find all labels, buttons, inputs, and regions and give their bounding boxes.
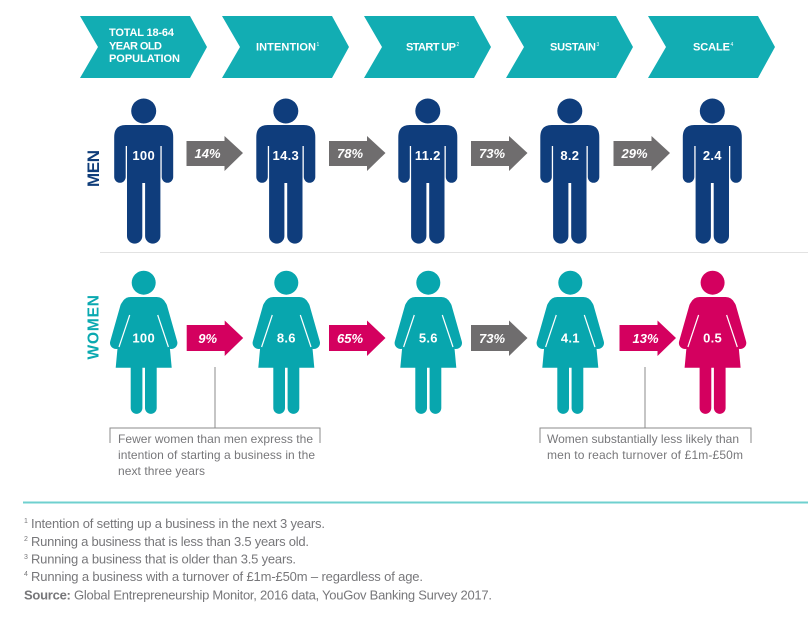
chevron: scale: SCALE	[693, 42, 730, 54]
woman figure: 5.6: 5.6	[419, 330, 438, 346]
chevron: total population: POPULATION	[109, 53, 180, 65]
man figure: 8.2: 8.2	[560, 148, 579, 163]
footnotes: Running a business that is older than 3.5 years.	[31, 552, 296, 566]
arrow: men 29%: 29%	[620, 146, 648, 161]
man figure: 11.2	[398, 98, 457, 244]
chevron: intention	[222, 16, 349, 78]
arrow: women 13%	[620, 320, 676, 356]
arrow: men 73%: 73%	[479, 146, 505, 161]
chevron: scale: 4	[730, 42, 734, 48]
callout: fewer women express intention	[110, 367, 320, 478]
man figure: 11.2: 11.2	[415, 148, 441, 163]
footnotes: 3	[24, 554, 28, 561]
arrow: women 73%: 73%	[479, 331, 505, 346]
chevron: sustain: 3	[596, 42, 600, 48]
footnotes: 4	[24, 571, 28, 578]
chevron: start up	[364, 16, 491, 78]
chevron: intention: 1	[316, 42, 320, 48]
footnotes: Intention of setting up a business in the next 3 years.	[31, 516, 325, 531]
callout: women less likely to scale	[540, 367, 751, 462]
footnotes: Source: Global Entrepreneurship Monitor, 2016 data, YouGov Banking Survey 2017.	[24, 588, 492, 602]
chevron: total population	[80, 16, 207, 78]
woman figure: 100	[116, 271, 172, 414]
callout: women less likely to scale: Women substantially less likely than	[547, 432, 739, 446]
footnotes: 1	[24, 518, 28, 525]
arrow: men 78%	[329, 136, 386, 171]
arrow: women 73%	[471, 320, 528, 356]
man figure: 14.3: 14.3	[273, 148, 299, 163]
woman figure: 8.6	[258, 271, 314, 414]
chevron: total population: YEAR OLD	[109, 40, 162, 52]
chevron: intention: INTENTION	[256, 42, 316, 54]
stage headers row	[80, 16, 775, 78]
arrow: men 29%	[614, 136, 670, 171]
man figure: 100	[114, 98, 173, 244]
callout: fewer women express intention: next three years	[118, 464, 205, 478]
man figure: 2.4: 2.4	[703, 148, 722, 163]
arrow: women 13%: 13%	[632, 331, 659, 346]
woman figure: 5.6	[400, 271, 456, 414]
woman figure: 0.5 highlighted	[685, 271, 741, 414]
men row label: MEN	[84, 150, 103, 187]
man figure: 2.4	[683, 98, 742, 244]
footnotes: Running a business that is less than 3.5 years old.	[31, 534, 309, 549]
arrow: men 14%	[186, 136, 243, 171]
footnotes	[24, 516, 492, 602]
woman figure: 0.5 highlighted: 0.5	[703, 330, 722, 346]
women row label: WOMEN	[86, 295, 102, 360]
callout: fewer women express intention: Fewer women than men express the	[118, 432, 313, 446]
woman figure: 8.6: 8.6	[277, 330, 296, 346]
callout: fewer women express intention: intention of starting a business in the	[118, 448, 315, 462]
arrow: men 14%: 14%	[194, 146, 221, 161]
man figure: 100: 100	[132, 148, 155, 163]
arrow: women 65%: 65%	[337, 331, 363, 346]
arrow: men 73%	[471, 136, 528, 171]
chevron: start up: 2	[456, 42, 460, 48]
chevron: scale	[648, 16, 775, 78]
woman figure: 100: 100	[132, 330, 155, 346]
arrow: women 65%	[329, 320, 386, 356]
man figure: 14.3	[256, 98, 315, 244]
woman figure: 4.1: 4.1	[561, 330, 580, 346]
man figure: 8.2	[540, 98, 599, 244]
chevron: start up: START UP	[406, 42, 456, 54]
woman figure: 4.1	[542, 271, 598, 414]
footnotes: 2	[24, 536, 28, 543]
chevron: sustain: SUSTAIN	[550, 42, 596, 54]
footnotes: Running a business with a turnover of £1m-£50m – regardless of age.	[31, 569, 423, 584]
chevron: sustain	[506, 16, 633, 78]
arrow: men 78%: 78%	[337, 146, 363, 161]
arrow: women 9%	[187, 320, 243, 356]
arrow: women 9%: 9%	[198, 331, 218, 346]
callout: women less likely to scale: men to reach turnover of £1m-£50m	[547, 448, 743, 462]
chevron: total population: TOTAL 18-64	[109, 27, 175, 39]
